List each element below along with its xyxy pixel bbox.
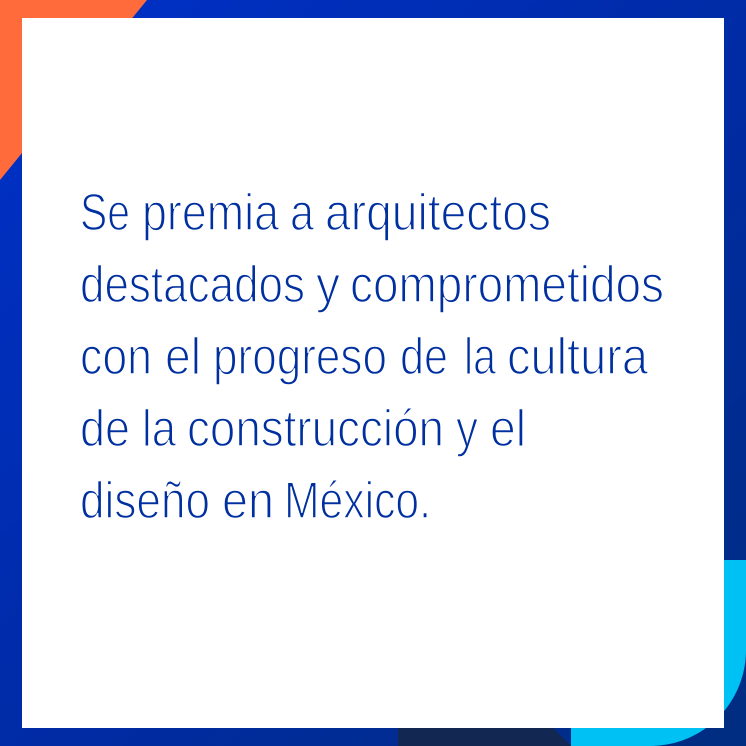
dark navy bottom band xyxy=(398,728,571,746)
main text block: construcción xyxy=(187,400,444,458)
main text block: la xyxy=(464,328,496,386)
main text block: y xyxy=(316,256,340,314)
main text block: destacados xyxy=(80,256,305,314)
main text block: el xyxy=(490,400,526,458)
main text block: México. xyxy=(284,472,431,530)
main text block xyxy=(80,184,664,530)
main text block: en xyxy=(222,472,274,530)
main text block: diseño xyxy=(80,472,210,530)
main text block: con xyxy=(80,328,152,386)
main text block: a xyxy=(290,184,314,242)
main text block: la xyxy=(142,400,176,458)
main text block: de xyxy=(400,328,448,386)
orange corner shape xyxy=(0,0,147,180)
main text block: arquitectos xyxy=(325,184,551,242)
main text block: premia xyxy=(142,184,279,242)
main text block: progreso xyxy=(213,328,387,386)
main text block: y xyxy=(456,400,478,458)
main text block: de xyxy=(80,400,130,458)
main text block: comprometidos xyxy=(350,256,664,314)
main text block: cultura xyxy=(507,328,648,386)
main text block: Se xyxy=(80,184,130,242)
cyan rounded corner shape xyxy=(571,560,746,746)
main text block: el xyxy=(165,328,201,386)
